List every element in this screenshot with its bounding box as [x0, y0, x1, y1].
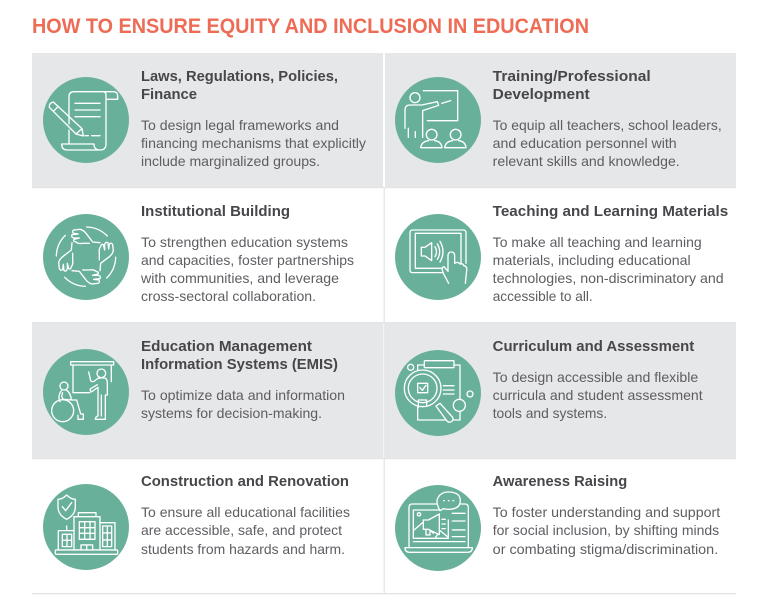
panel: awareness raising — [395, 474, 720, 571]
text block: students from hazards and harm. — [141, 541, 345, 557]
panel: teaching and learning materials — [395, 204, 728, 304]
title: HOW TO ENSURE EQUITY AND INCLUSION IN EDUCATION — [32, 15, 589, 38]
heading: Curriculum and Assessment — [493, 339, 694, 355]
panel: institutional building — [43, 204, 354, 304]
heading: Institutional Building — [141, 204, 290, 220]
icon: clipboard under magnifying glass — [395, 350, 481, 436]
text block — [141, 504, 350, 557]
heading: Teaching and Learning Materials — [493, 204, 728, 220]
text block: accessible to all. — [493, 288, 593, 304]
panel: construction and renovation — [43, 474, 350, 570]
text block: tools and systems. — [493, 405, 607, 421]
text block: financing mechanisms that explicitly — [141, 135, 366, 151]
text block: cross-sectoral collaboration. — [141, 288, 316, 304]
icon: presenter and wheelchair user — [43, 349, 129, 435]
icon: scroll and pen — [43, 77, 129, 163]
text block: curricula and student assessment — [493, 387, 703, 403]
text block: and capacities, foster partnerships — [141, 252, 354, 268]
heading — [141, 69, 338, 103]
heading — [493, 69, 651, 103]
text block — [493, 234, 724, 304]
text block: To ensure all educational facilities — [141, 504, 350, 520]
text block: To foster understanding and support — [493, 504, 720, 520]
text block: materials, including educational — [493, 252, 691, 268]
text block: are accessible, safe, and protect — [141, 522, 342, 538]
text block: and education personnel with — [493, 135, 677, 151]
text block: To strengthen education systems — [141, 234, 348, 250]
icon: four joined hands — [43, 214, 129, 300]
text block: To design legal frameworks and — [141, 117, 339, 133]
text block: technologies, non-discriminatory and — [493, 270, 724, 286]
icon: shielded school building — [43, 484, 129, 570]
text block: To design accessible and flexible — [493, 369, 698, 385]
text block: for social inclusion, by shifting minds — [493, 522, 719, 538]
text block: systems for decision-making. — [141, 405, 322, 421]
panel: training and professional development — [385, 53, 736, 187]
heading: Information Systems (EMIS) — [141, 357, 338, 373]
text block — [493, 369, 703, 421]
text block: To equip all teachers, school leaders, — [493, 117, 722, 133]
icon: tablet with sound and touching hand — [395, 214, 481, 300]
text block: To optimize data and information — [141, 387, 345, 403]
text block — [493, 504, 720, 557]
panel: education management information systems — [32, 323, 383, 458]
panel: laws, regulations, policies, finance — [32, 53, 383, 187]
panel background — [32, 53, 383, 187]
heading: Finance — [141, 87, 197, 103]
heading: Education Management — [141, 339, 312, 355]
text block — [140, 234, 354, 304]
heading: Awareness Raising — [493, 474, 627, 490]
text block — [141, 117, 366, 169]
panel background — [385, 53, 736, 187]
heading: Training/Professional — [493, 69, 651, 85]
panel background — [32, 323, 383, 458]
panel: curriculum and assessment — [385, 323, 736, 458]
text block: include marginalized groups. — [141, 153, 320, 169]
text block: To make all teaching and learning — [493, 234, 702, 250]
icon: laptop with megaphone and speech bubble — [395, 485, 481, 571]
icon: teacher and students — [395, 77, 481, 163]
text block: or combating stigma/discrimination. — [493, 541, 718, 557]
heading — [141, 339, 338, 373]
panel background — [385, 323, 736, 458]
text block: relevant skills and knowledge. — [493, 153, 680, 169]
heading: Laws, Regulations, Policies, — [141, 69, 338, 85]
text block — [493, 117, 722, 169]
heading: Development — [493, 87, 590, 103]
text block: with communities, and leverage — [140, 270, 339, 286]
text block — [141, 387, 345, 421]
heading: Construction and Renovation — [141, 474, 349, 490]
